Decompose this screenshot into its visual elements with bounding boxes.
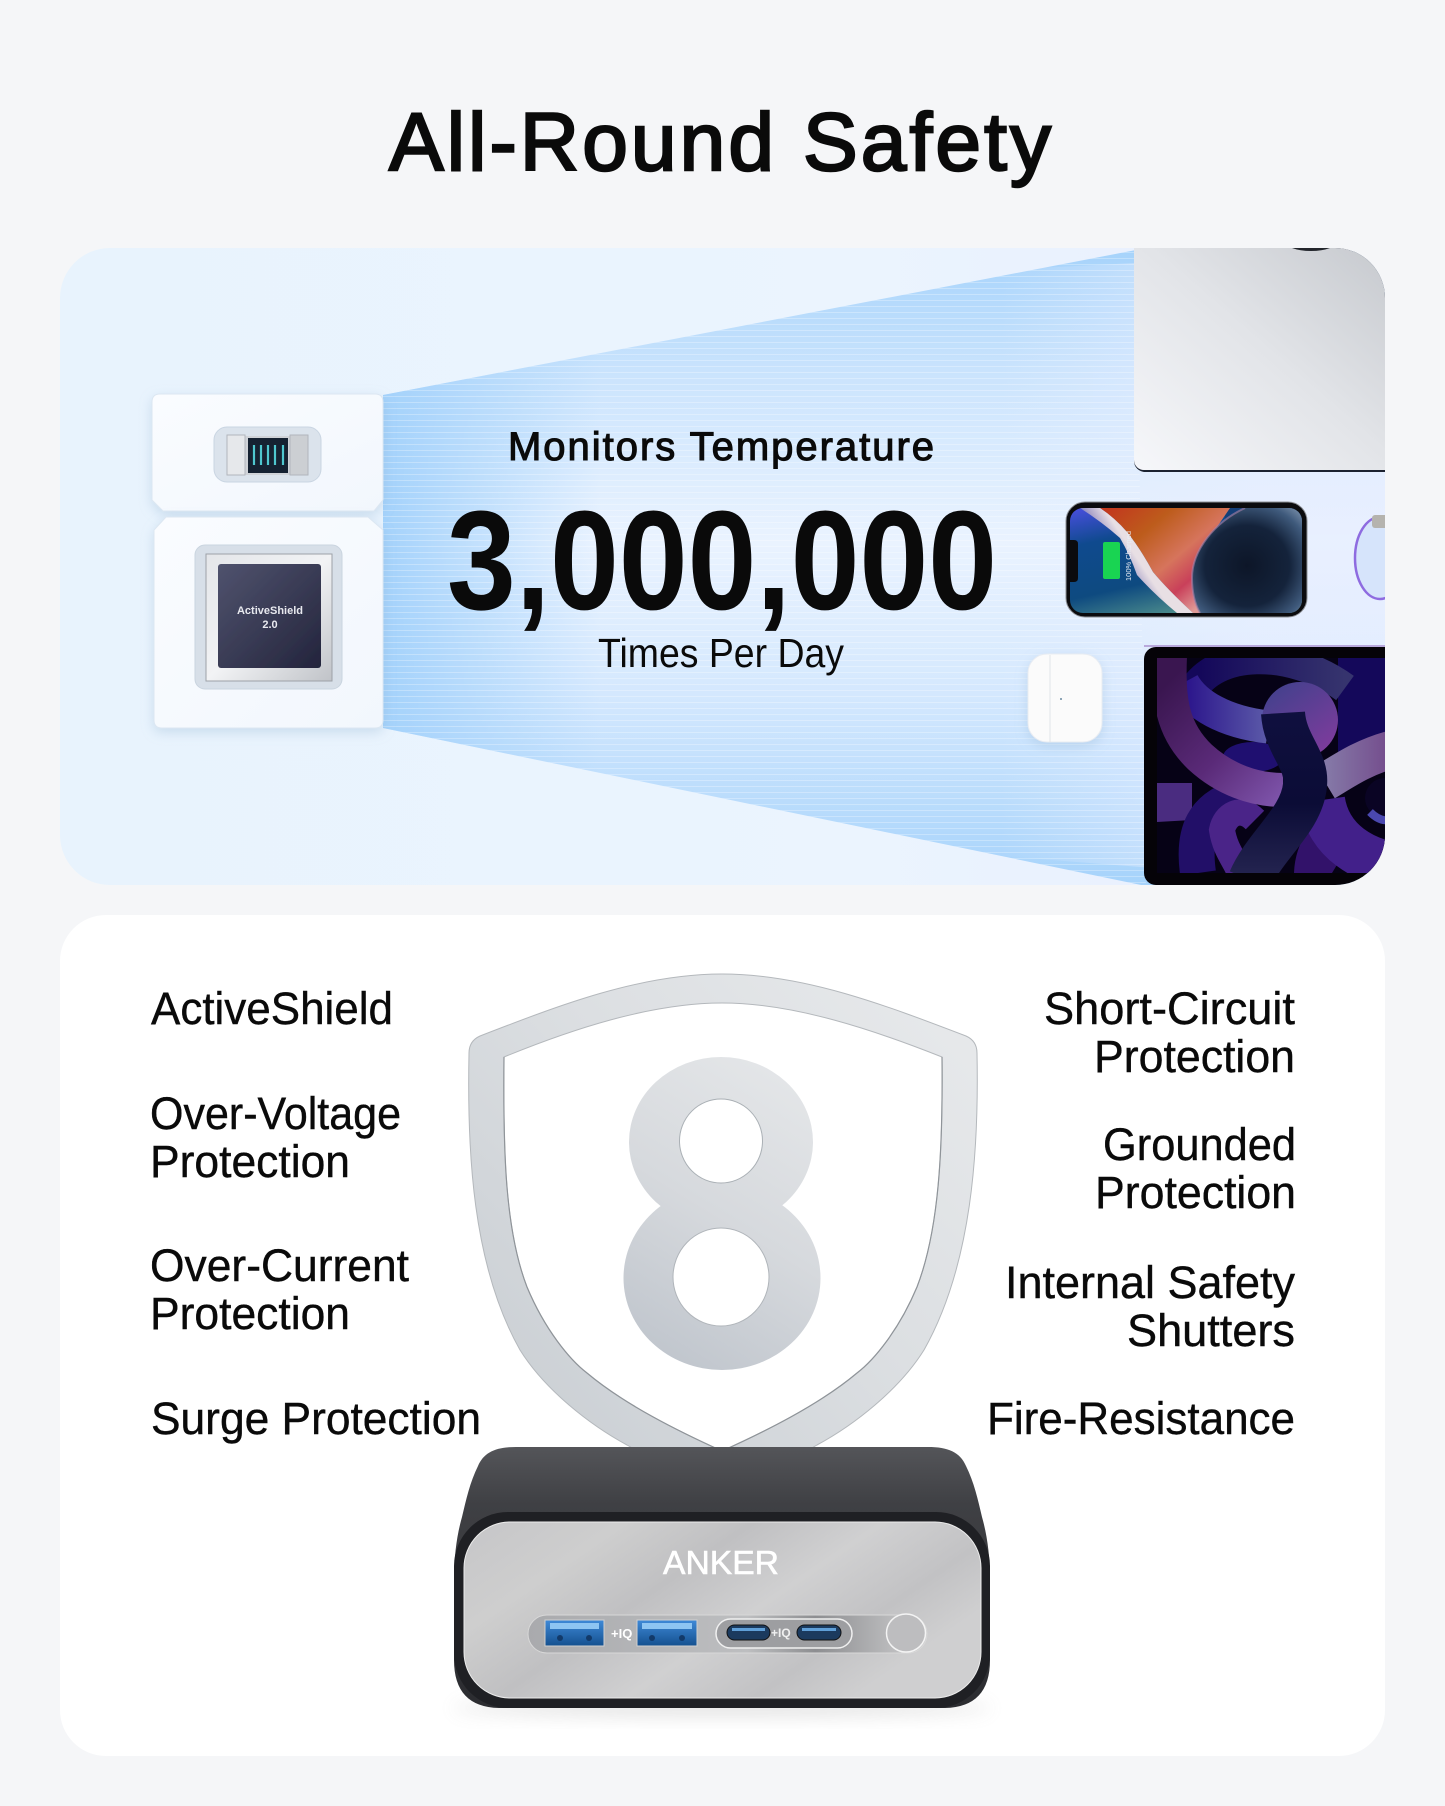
label: Short-Circuit Protection: Short-Circuit — [1044, 983, 1295, 1034]
device: laptop — [1134, 248, 1385, 472]
device: smartphone: 100% Charged — [1124, 531, 1133, 581]
panel: eight protections — [60, 915, 1385, 1756]
label: Internal Safety Shutters: Shutters — [1127, 1305, 1295, 1356]
label: Over-Current Protection: Protection — [150, 1288, 350, 1339]
label: Over-Current Protection: Over-Current — [150, 1240, 409, 1291]
temperature heading: Monitors Temperature — [508, 425, 934, 469]
feature list: right — [987, 983, 1296, 1444]
panel: temperature monitoring — [60, 236, 1405, 886]
label: Grounded Protection: Protection — [1095, 1167, 1296, 1218]
feature list: left — [150, 983, 481, 1444]
port strip — [528, 1614, 927, 1653]
card: ActiveShield chip — [154, 517, 383, 728]
icon: sensor component — [214, 427, 321, 482]
big number: 3,000,000 — [447, 481, 997, 639]
IQ label: +IQ — [611, 1626, 632, 1641]
icon: ActiveShield 2.0 chip: 2.0 — [262, 619, 278, 631]
label: Over-Voltage Protection: Protection — [150, 1136, 350, 1187]
label: Internal Safety Shutters: Internal Safety — [1005, 1257, 1295, 1308]
card: temperature sensor — [152, 394, 383, 511]
number 8 — [624, 1057, 820, 1370]
label: Grounded Protection: Grounded — [1103, 1119, 1296, 1170]
label: Surge Protection: Surge Protection — [151, 1393, 481, 1444]
inner edge line of shield — [504, 1057, 942, 1451]
USB-A port 1 — [545, 1620, 604, 1646]
USB-A port 2 — [637, 1620, 697, 1646]
icon: ActiveShield 2.0 chip — [195, 545, 342, 689]
title: All-Round Safety — [389, 97, 1051, 188]
USB-C group: +IQ — [771, 1626, 791, 1640]
device: smartwatch — [1354, 515, 1385, 600]
light beam — [383, 250, 1385, 886]
icon: full battery — [1103, 542, 1120, 579]
icon: shield with number 8 — [469, 974, 977, 1500]
label: Fire-Resistance: Fire-Resistance — [987, 1393, 1295, 1444]
device: earbuds case — [1028, 654, 1102, 742]
product: Anker charger — [452, 1447, 992, 1715]
brand logo: ANKER — [663, 1544, 779, 1581]
device: smartphone — [1066, 502, 1307, 617]
device: tablet — [1144, 645, 1405, 885]
power button — [886, 1614, 926, 1652]
temperature caption: Times Per Day — [598, 630, 844, 676]
label: ActiveShield: ActiveShield — [151, 983, 393, 1034]
label: Short-Circuit Protection: Protection — [1094, 1031, 1295, 1082]
charger body — [454, 1447, 990, 1708]
USB-C group — [716, 1619, 852, 1648]
charger face — [464, 1522, 981, 1698]
label: Over-Voltage Protection: Over-Voltage — [150, 1088, 401, 1139]
icon: ActiveShield 2.0 chip: ActiveShield — [237, 605, 303, 617]
